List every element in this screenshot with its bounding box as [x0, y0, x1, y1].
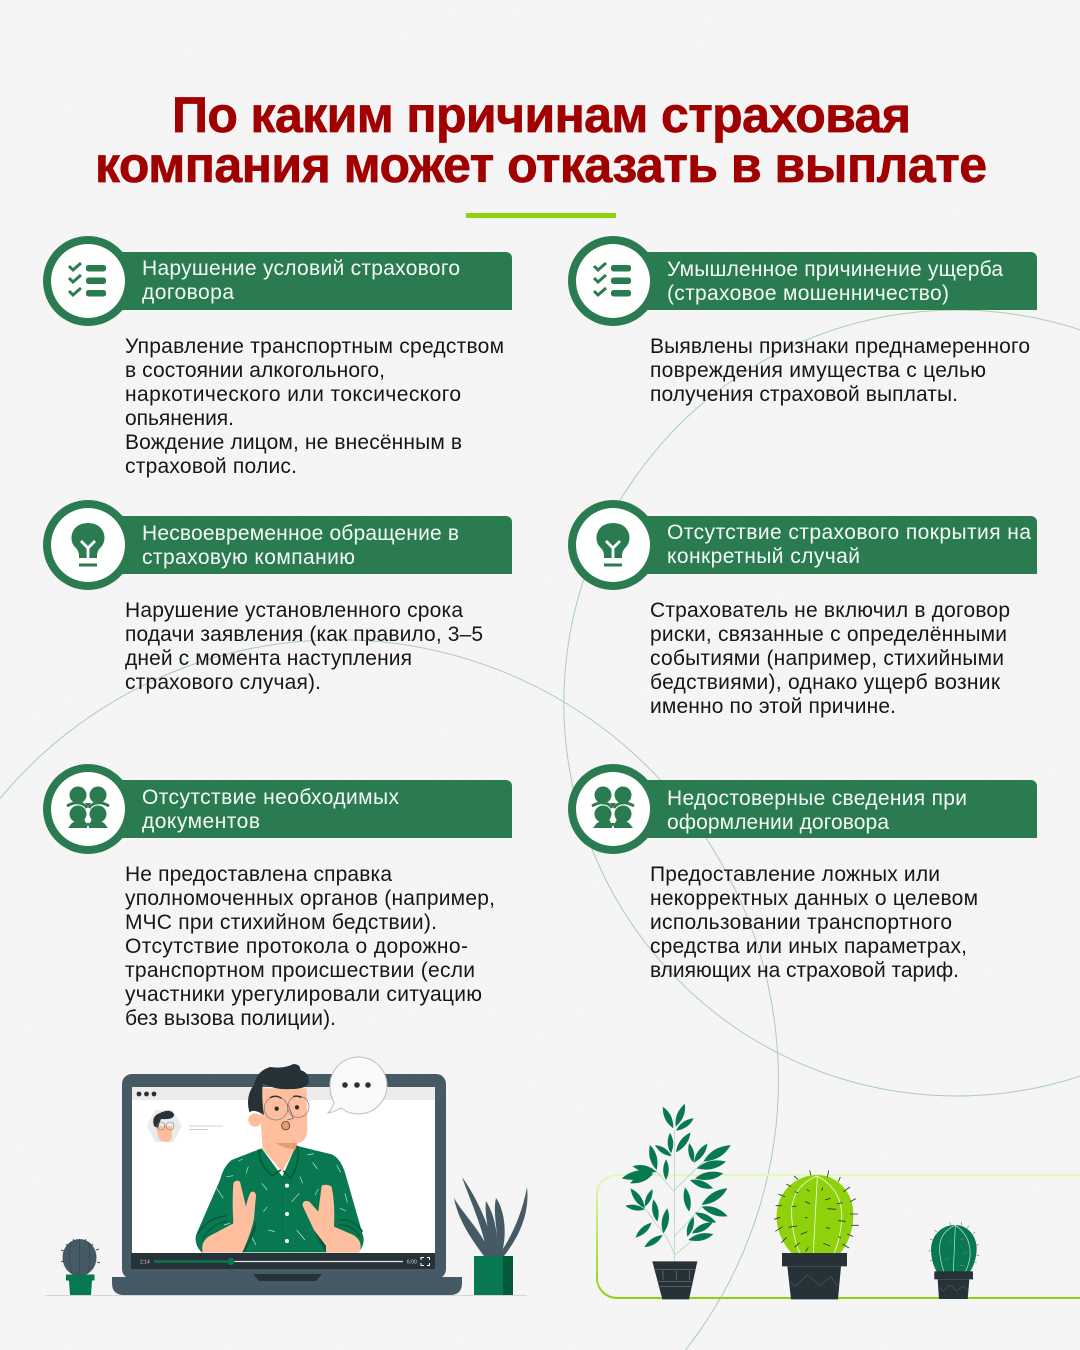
body text: дней с момента наступления: [125, 647, 412, 670]
header band with icon: people: [43, 764, 512, 854]
illustration: plants on the right: [621, 1103, 979, 1299]
body text: участники урегулировали ситуацию: [125, 983, 482, 1006]
body text: Предоставление ложных или: [650, 863, 940, 886]
header band with icon: light bulb: Отсутствие страхового покрытия на: [667, 521, 1031, 544]
header band with icon: light bulb: [568, 500, 1037, 590]
panel: нарушение условий: [43, 236, 512, 478]
header band with icon: checklist: [43, 236, 512, 326]
body text: [125, 335, 504, 478]
body text: Вождение лицом, не внесённым в: [125, 431, 462, 454]
body text: страховой полис.: [125, 455, 297, 478]
potted plant with dark leaves: [454, 1177, 527, 1295]
body text: подачи заявления (как правило, 3–5: [125, 623, 483, 646]
body text: бедствиями), однако ущерб возник: [650, 671, 1001, 694]
panel: недостоверные сведения: [568, 764, 1037, 982]
header band with icon: light bulb: страховую компанию: [142, 546, 355, 569]
title: [95, 87, 987, 193]
body text: без вызова полиции).: [125, 1007, 336, 1030]
header band with icon: checklist: Нарушение условий страхового: [142, 257, 460, 280]
header band with icon: light bulb: конкретный случай: [667, 545, 860, 568]
title: По каким причинам страховая: [172, 87, 911, 143]
body text: [650, 863, 978, 982]
decorative large circle outlines: [0, 310, 1080, 1350]
body text: Выявлены признаки преднамеренного: [650, 335, 1030, 358]
body text: МЧС при стихийном бедствии).: [125, 911, 437, 934]
body text: страхового случая).: [125, 671, 321, 694]
body text: Отсутствие протокола о дорожно-: [125, 935, 468, 958]
leafy plant in pot: [621, 1103, 733, 1299]
header band with icon: people: документов: [142, 810, 260, 833]
presenter: [196, 1064, 364, 1252]
header band with icon: checklist: Умышленное причинение ущерба: [667, 258, 1003, 281]
video controls: 6:00: [407, 1260, 417, 1266]
body text: получения страховой выплаты.: [650, 383, 958, 406]
video controls: [131, 1253, 435, 1269]
panel: отсутствие страхового покрытия: [568, 500, 1037, 718]
body text: уполномоченных органов (например,: [125, 887, 495, 910]
header band with icon: checklist: договора: [142, 281, 234, 304]
panel: несвоевременное обращение: [43, 500, 512, 694]
body text: событиями (например, стихийными: [650, 647, 1004, 670]
body text: в состоянии алкогольного,: [125, 359, 385, 382]
header band with icon: light bulb: [43, 500, 512, 590]
body text: Управление транспортным средством: [125, 335, 504, 358]
small green cactus in pot: [929, 1222, 979, 1299]
header band with icon: people: [568, 764, 1037, 854]
title accent bar: [466, 213, 616, 218]
header band with icon: checklist: [568, 236, 1037, 326]
header band with icon: light bulb: Несвоевременное обращение в: [142, 522, 459, 545]
header band with icon: people: Отсутствие необходимых: [142, 786, 400, 809]
body text: Нарушение установленного срока: [125, 599, 463, 622]
panel: умышленное причинение ущерба: [568, 236, 1037, 406]
small dark cactus: [61, 1239, 100, 1295]
panel: отсутствие документов: [43, 764, 512, 1030]
body text: использовании транспортного: [650, 911, 952, 934]
illustration: laptop with presenter: [45, 1057, 527, 1296]
lime rounded frame behind plants: [597, 1175, 1080, 1298]
body text: влияющих на страховой тариф.: [650, 959, 959, 982]
body text: транспортном происшествии (если: [125, 959, 475, 982]
laptop: [112, 1074, 462, 1295]
body text: [125, 863, 495, 1030]
ground line: [45, 1294, 527, 1296]
body text: средства или иных параметрах,: [650, 935, 967, 958]
body text: риски, связанные с определёнными: [650, 623, 1007, 646]
body text: [650, 335, 1030, 406]
header band with icon: people: оформлении договора: [667, 811, 889, 834]
body text: именно по этой причине.: [650, 695, 896, 718]
header band with icon: checklist: (страховое мошенничество): [667, 282, 949, 305]
header band with icon: people: Недостоверные сведения при: [667, 787, 967, 810]
title: компания может отказать в выплате: [95, 137, 987, 193]
body text: [125, 599, 483, 694]
video avatar: [147, 1110, 223, 1142]
big lime cactus in pot: [774, 1171, 859, 1299]
body text: повреждения имущества с целью: [650, 359, 986, 382]
speech bubble: [328, 1057, 387, 1114]
body text: наркотического или токсического: [125, 383, 461, 406]
body text: некорректных данных о целевом: [650, 887, 978, 910]
body text: опьянения.: [125, 407, 234, 430]
video controls: 2:14: [140, 1260, 150, 1266]
body text: Не предоставлена справка: [125, 863, 392, 886]
body text: Страхователь не включил в договор: [650, 599, 1010, 622]
body text: [650, 599, 1010, 718]
